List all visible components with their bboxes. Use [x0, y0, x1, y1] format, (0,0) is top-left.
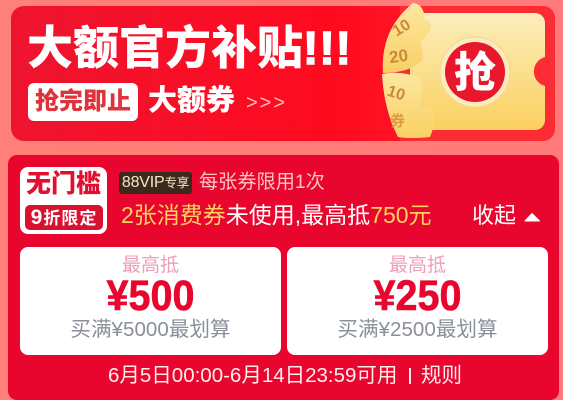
fan of coupons: 20: [388, 46, 409, 67]
red right zone: [400, 6, 555, 141]
badge discount: 9折限定: [31, 206, 97, 229]
threshold: 买满¥2500最划算: [337, 318, 498, 341]
icon: coupon ticket: [382, 3, 555, 141]
badge title: 无门槛: [26, 170, 101, 198]
amount: ¥500: [106, 272, 195, 320]
grab button: [440, 37, 510, 107]
grab button: 抢: [454, 39, 496, 100]
card label: 最高抵: [122, 255, 179, 276]
panel: top banner: [11, 6, 555, 141]
validity and rules: 6月5日00:00-6月14日23:59可用: [108, 364, 397, 387]
arrows: >>>: [246, 92, 287, 114]
threshold: 买满¥5000最划算: [70, 318, 231, 341]
sub heading: 大额券: [148, 85, 235, 117]
icon: up triangle: [524, 213, 540, 222]
fan of coupons: 10: [390, 16, 414, 40]
card label: 最高抵: [389, 255, 446, 276]
panel: coupon details: [8, 155, 559, 400]
card: 500 coupon: [20, 247, 281, 355]
collapse control: 收起: [472, 203, 516, 228]
fan of coupons: [382, 3, 434, 138]
card: 250 coupon: [287, 247, 548, 355]
fan of coupons: 10: [385, 83, 407, 104]
tag: limited: [28, 83, 138, 121]
tag: 88VIP: 88VIP专享: [122, 174, 189, 191]
limit note: 每张券限用1次: [199, 172, 325, 193]
badge: no threshold: [20, 167, 107, 234]
validity and rules: 规则: [421, 364, 462, 387]
banner heading: 大额官方补贴!!!: [27, 22, 352, 74]
coupon summary: 2张消费券未使用,最高抵750元: [121, 202, 432, 228]
fan of coupons: 券: [390, 110, 405, 131]
ticket body: [410, 13, 545, 130]
tag: limited: 抢完即止: [35, 88, 131, 115]
amount: ¥250: [373, 272, 462, 320]
